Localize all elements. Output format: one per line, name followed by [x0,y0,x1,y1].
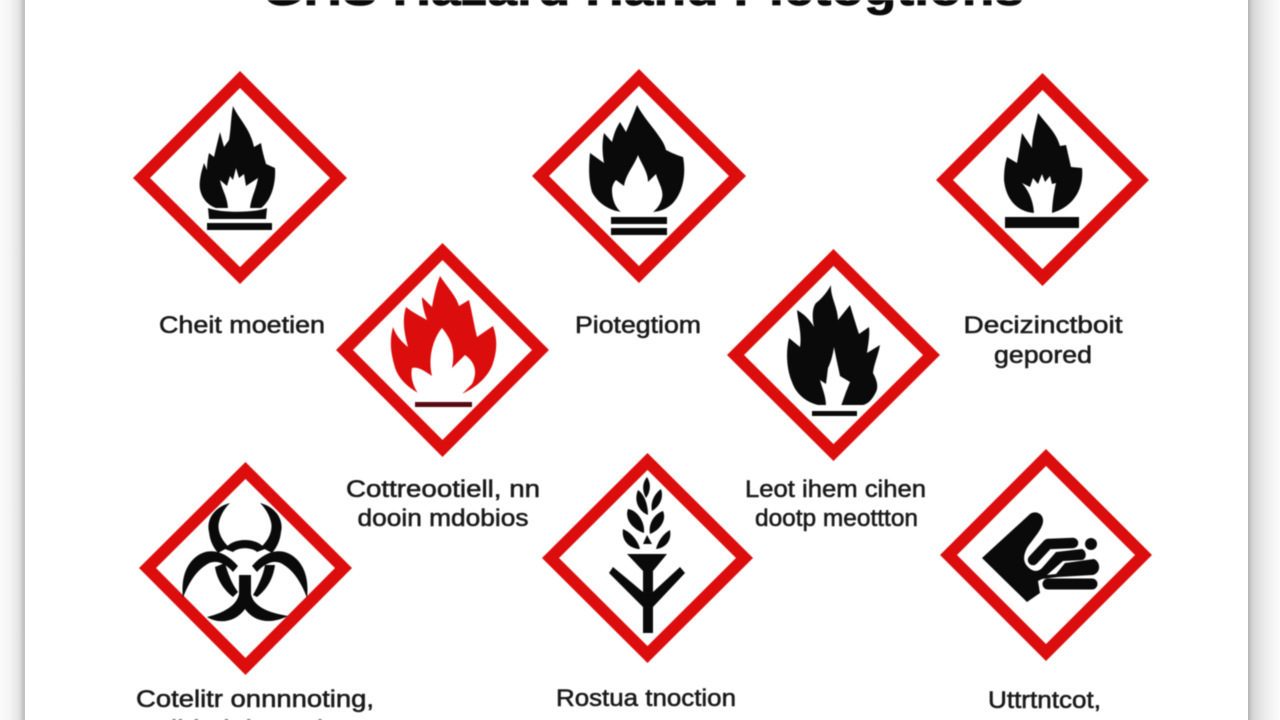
flame icon [200,106,275,230]
label: black flame line one: Leot ihem cihen [745,476,926,503]
right page shadow [1248,0,1280,720]
diamond border [550,462,744,654]
flame icon [589,105,684,235]
diamond border [142,80,338,276]
pictogram: flame top left [142,80,338,276]
pictogram: red flame [344,252,540,448]
diamond border [736,258,932,452]
diamond border [944,82,1140,278]
plant icon [609,477,685,633]
label: plant: Rostua tnoction [556,685,736,712]
label: top right: Decizinctboit [964,312,1123,339]
biohazard icon [183,503,307,621]
left page shadow [0,0,25,720]
pictogram: flame top right [944,82,1140,278]
label: biohazard: Cotelitr onnnnoting, [136,686,374,713]
flame icon [1004,113,1082,228]
red flame icon [391,276,496,407]
diamond border [540,78,738,274]
label: hand: Uttrtntcot, [988,687,1101,714]
diamond border [148,470,344,666]
hand icon [982,512,1099,602]
pictogram: hand [948,458,1144,652]
label: top right second line: gepored [994,342,1092,369]
diamond border [344,252,540,448]
pictogram: biohazard [148,470,344,666]
flame icon [787,285,880,416]
label: red flame line one: Cottreootiell, nn [346,476,540,503]
label: red flame line two: dooin mdobios [358,505,528,532]
pictogram: flame top centre [540,78,738,274]
diamond border [948,458,1144,652]
label: top centre: Piotegtiom [575,312,701,339]
label: black flame line two: dootp meottton [755,505,918,532]
pictogram: plant [550,462,744,654]
pictogram: black flame centre right [736,258,932,452]
label: top left: Cheit moetien [159,312,325,339]
